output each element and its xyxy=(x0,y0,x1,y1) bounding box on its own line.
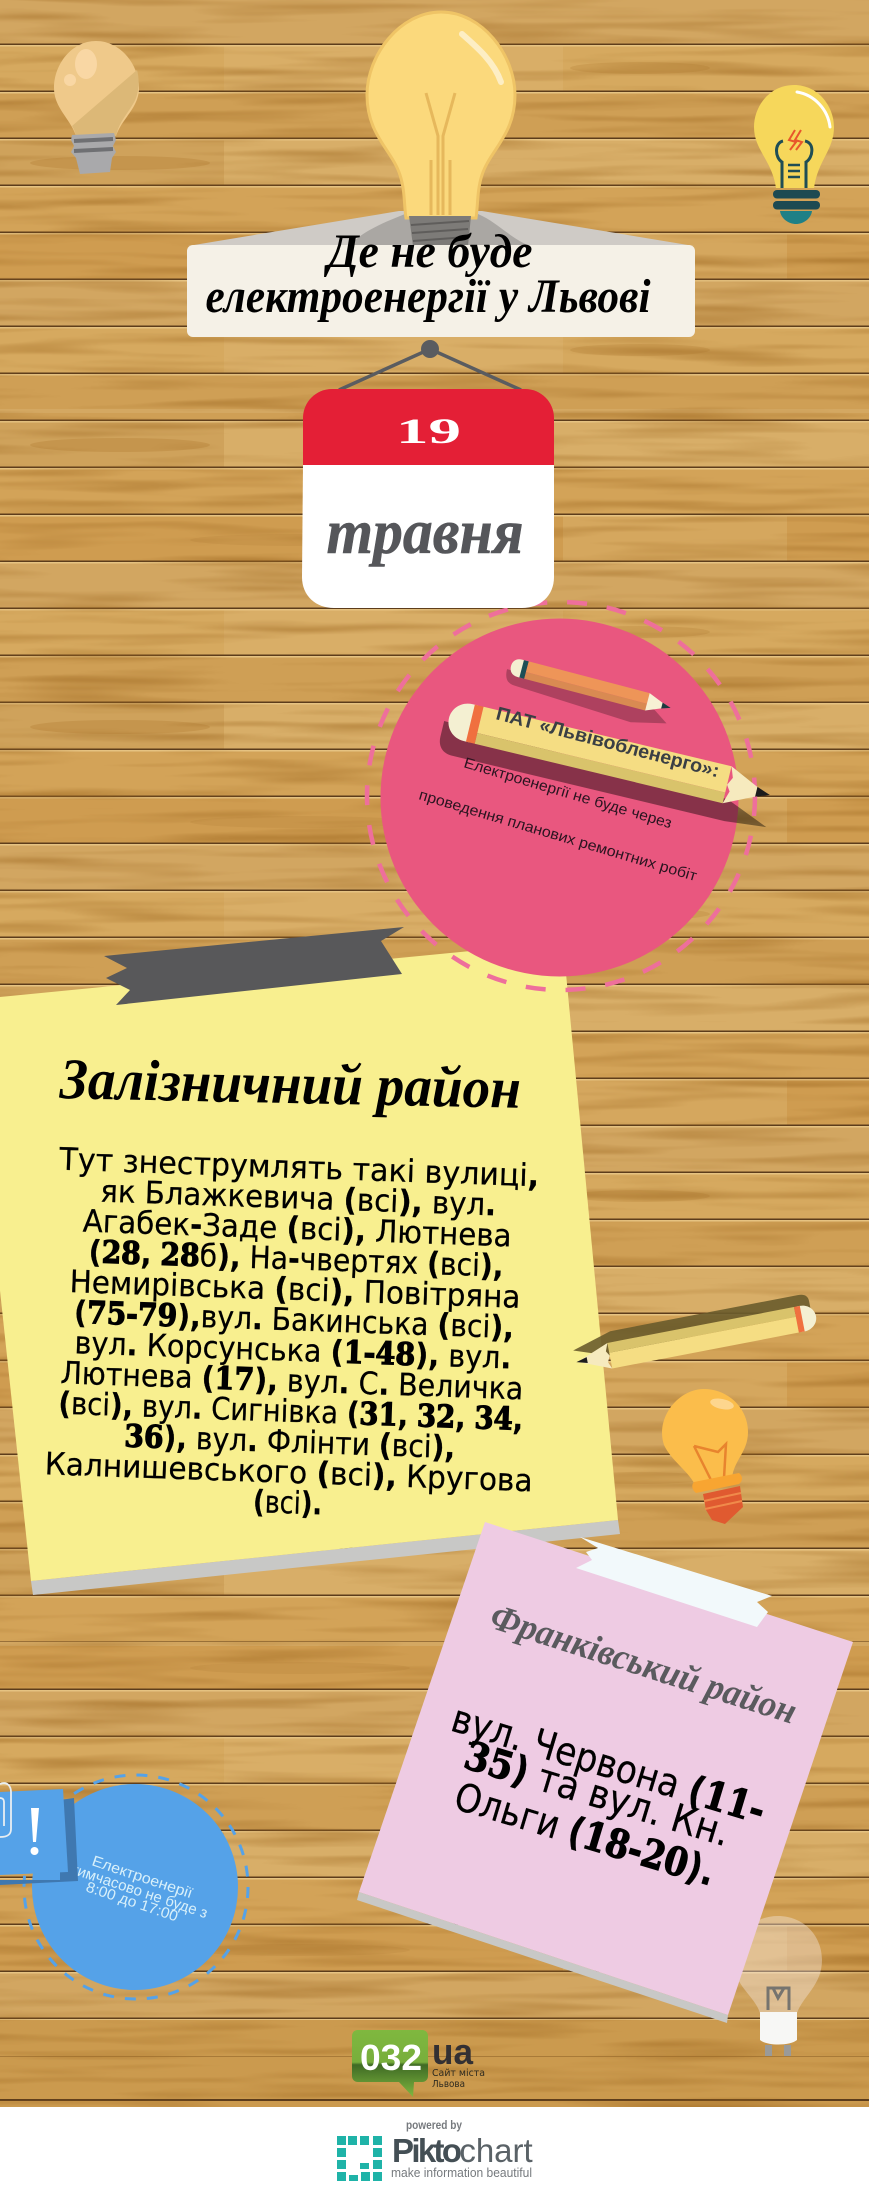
dashed ring xyxy=(367,602,755,990)
powered by: powered by xyxy=(406,2120,463,2132)
street list: (75-79),вул. Бакинська (всі), xyxy=(74,1295,515,1346)
street list: 35) та вул. Кн. xyxy=(459,1733,736,1856)
month: травня xyxy=(326,496,524,567)
title banner: електроенергії у Львові xyxy=(206,270,651,323)
032.ua logo: 032 xyxy=(360,2037,422,2078)
street list xyxy=(43,1142,544,1530)
street list: 36), вул. Флінти (всі), xyxy=(124,1419,456,1466)
icon: orange bulb xyxy=(662,1389,748,1524)
teal grid icon xyxy=(337,2136,382,2181)
street list: Агабек-Заде (всі), Лютнева xyxy=(82,1203,512,1254)
title banner xyxy=(187,225,695,337)
blue circle panel: outage time xyxy=(0,1775,248,1999)
title banner: Де не буде xyxy=(324,225,532,278)
icon: top right yellow bulb xyxy=(754,85,834,224)
dashed ring xyxy=(24,1775,248,1999)
street list: Лютнева (17), вул. С. Величка xyxy=(60,1355,524,1407)
note sheet xyxy=(357,1522,853,2023)
pink circle panel: ПАТ Львівобленерго xyxy=(367,602,778,990)
reason line two: проведення планових ремонтних робіт xyxy=(417,787,699,885)
street list: як Блажкевича (всі), вул. xyxy=(100,1174,497,1223)
calendar hanger xyxy=(339,340,521,390)
pink note: Франківський район xyxy=(357,1522,853,2023)
alert note with paperclip xyxy=(0,1783,78,1885)
right yellow pencil xyxy=(571,1292,818,1375)
pink disc xyxy=(380,618,738,976)
outage text: Електроенерії xyxy=(90,1853,196,1902)
dark tape xyxy=(104,927,404,1005)
032.ua logo: Сайт міста xyxy=(432,2068,485,2079)
district heading: Залізничний район xyxy=(58,1046,522,1121)
blue disc xyxy=(32,1784,238,1990)
street list: вул. Корсунська (1-48), вул. xyxy=(74,1325,512,1377)
street list: Тут знеструмлять такі вулиці, xyxy=(58,1142,540,1194)
wordmark: Piktochart xyxy=(392,2132,533,2169)
032.ua logo: Львова xyxy=(432,2079,465,2090)
reason line one: Електроенергії не буде через xyxy=(462,755,674,832)
Piktochart footer logo xyxy=(337,2120,533,2181)
street list: вул. Червона (11- xyxy=(446,1696,771,1834)
small orange pencil xyxy=(502,657,673,731)
calendar card xyxy=(302,389,554,608)
tagline: make information beautiful xyxy=(391,2166,532,2180)
street list xyxy=(446,1696,771,1896)
yellow note: Залізничний район xyxy=(0,927,620,1595)
street list: Ольги (18-20). xyxy=(449,1774,721,1896)
note sheet xyxy=(0,942,620,1595)
icon: big central light bulb xyxy=(188,12,694,246)
032.ua logo xyxy=(352,2030,485,2097)
032.ua logo: ua xyxy=(432,2031,474,2072)
street list: Немирівська (всі), Повітряна xyxy=(69,1264,521,1316)
white tape xyxy=(576,1537,772,1627)
street list: (всі), вул. Сигнівка (31, 32, 34, xyxy=(58,1386,524,1438)
street list: (28, 28б), На-чвертях (всі), xyxy=(88,1234,504,1285)
outage text: тимчасово не буде з xyxy=(69,1861,210,1922)
street list: Калнишевського (всі), Кругова xyxy=(44,1446,533,1499)
street list: (всі). xyxy=(253,1484,323,1522)
footer white strip xyxy=(0,2107,869,2194)
date number: 19 xyxy=(396,411,461,451)
icon: top left pale bulb xyxy=(54,41,139,174)
big yellow pencil xyxy=(437,699,778,831)
district heading: Франківський район xyxy=(485,1597,802,1733)
pencil label: ПАТ «Львівобленерго»: xyxy=(494,704,722,782)
outage text: 8:00 до 17:00 xyxy=(84,1879,180,1925)
icon: ghost bulb xyxy=(733,1916,822,2056)
